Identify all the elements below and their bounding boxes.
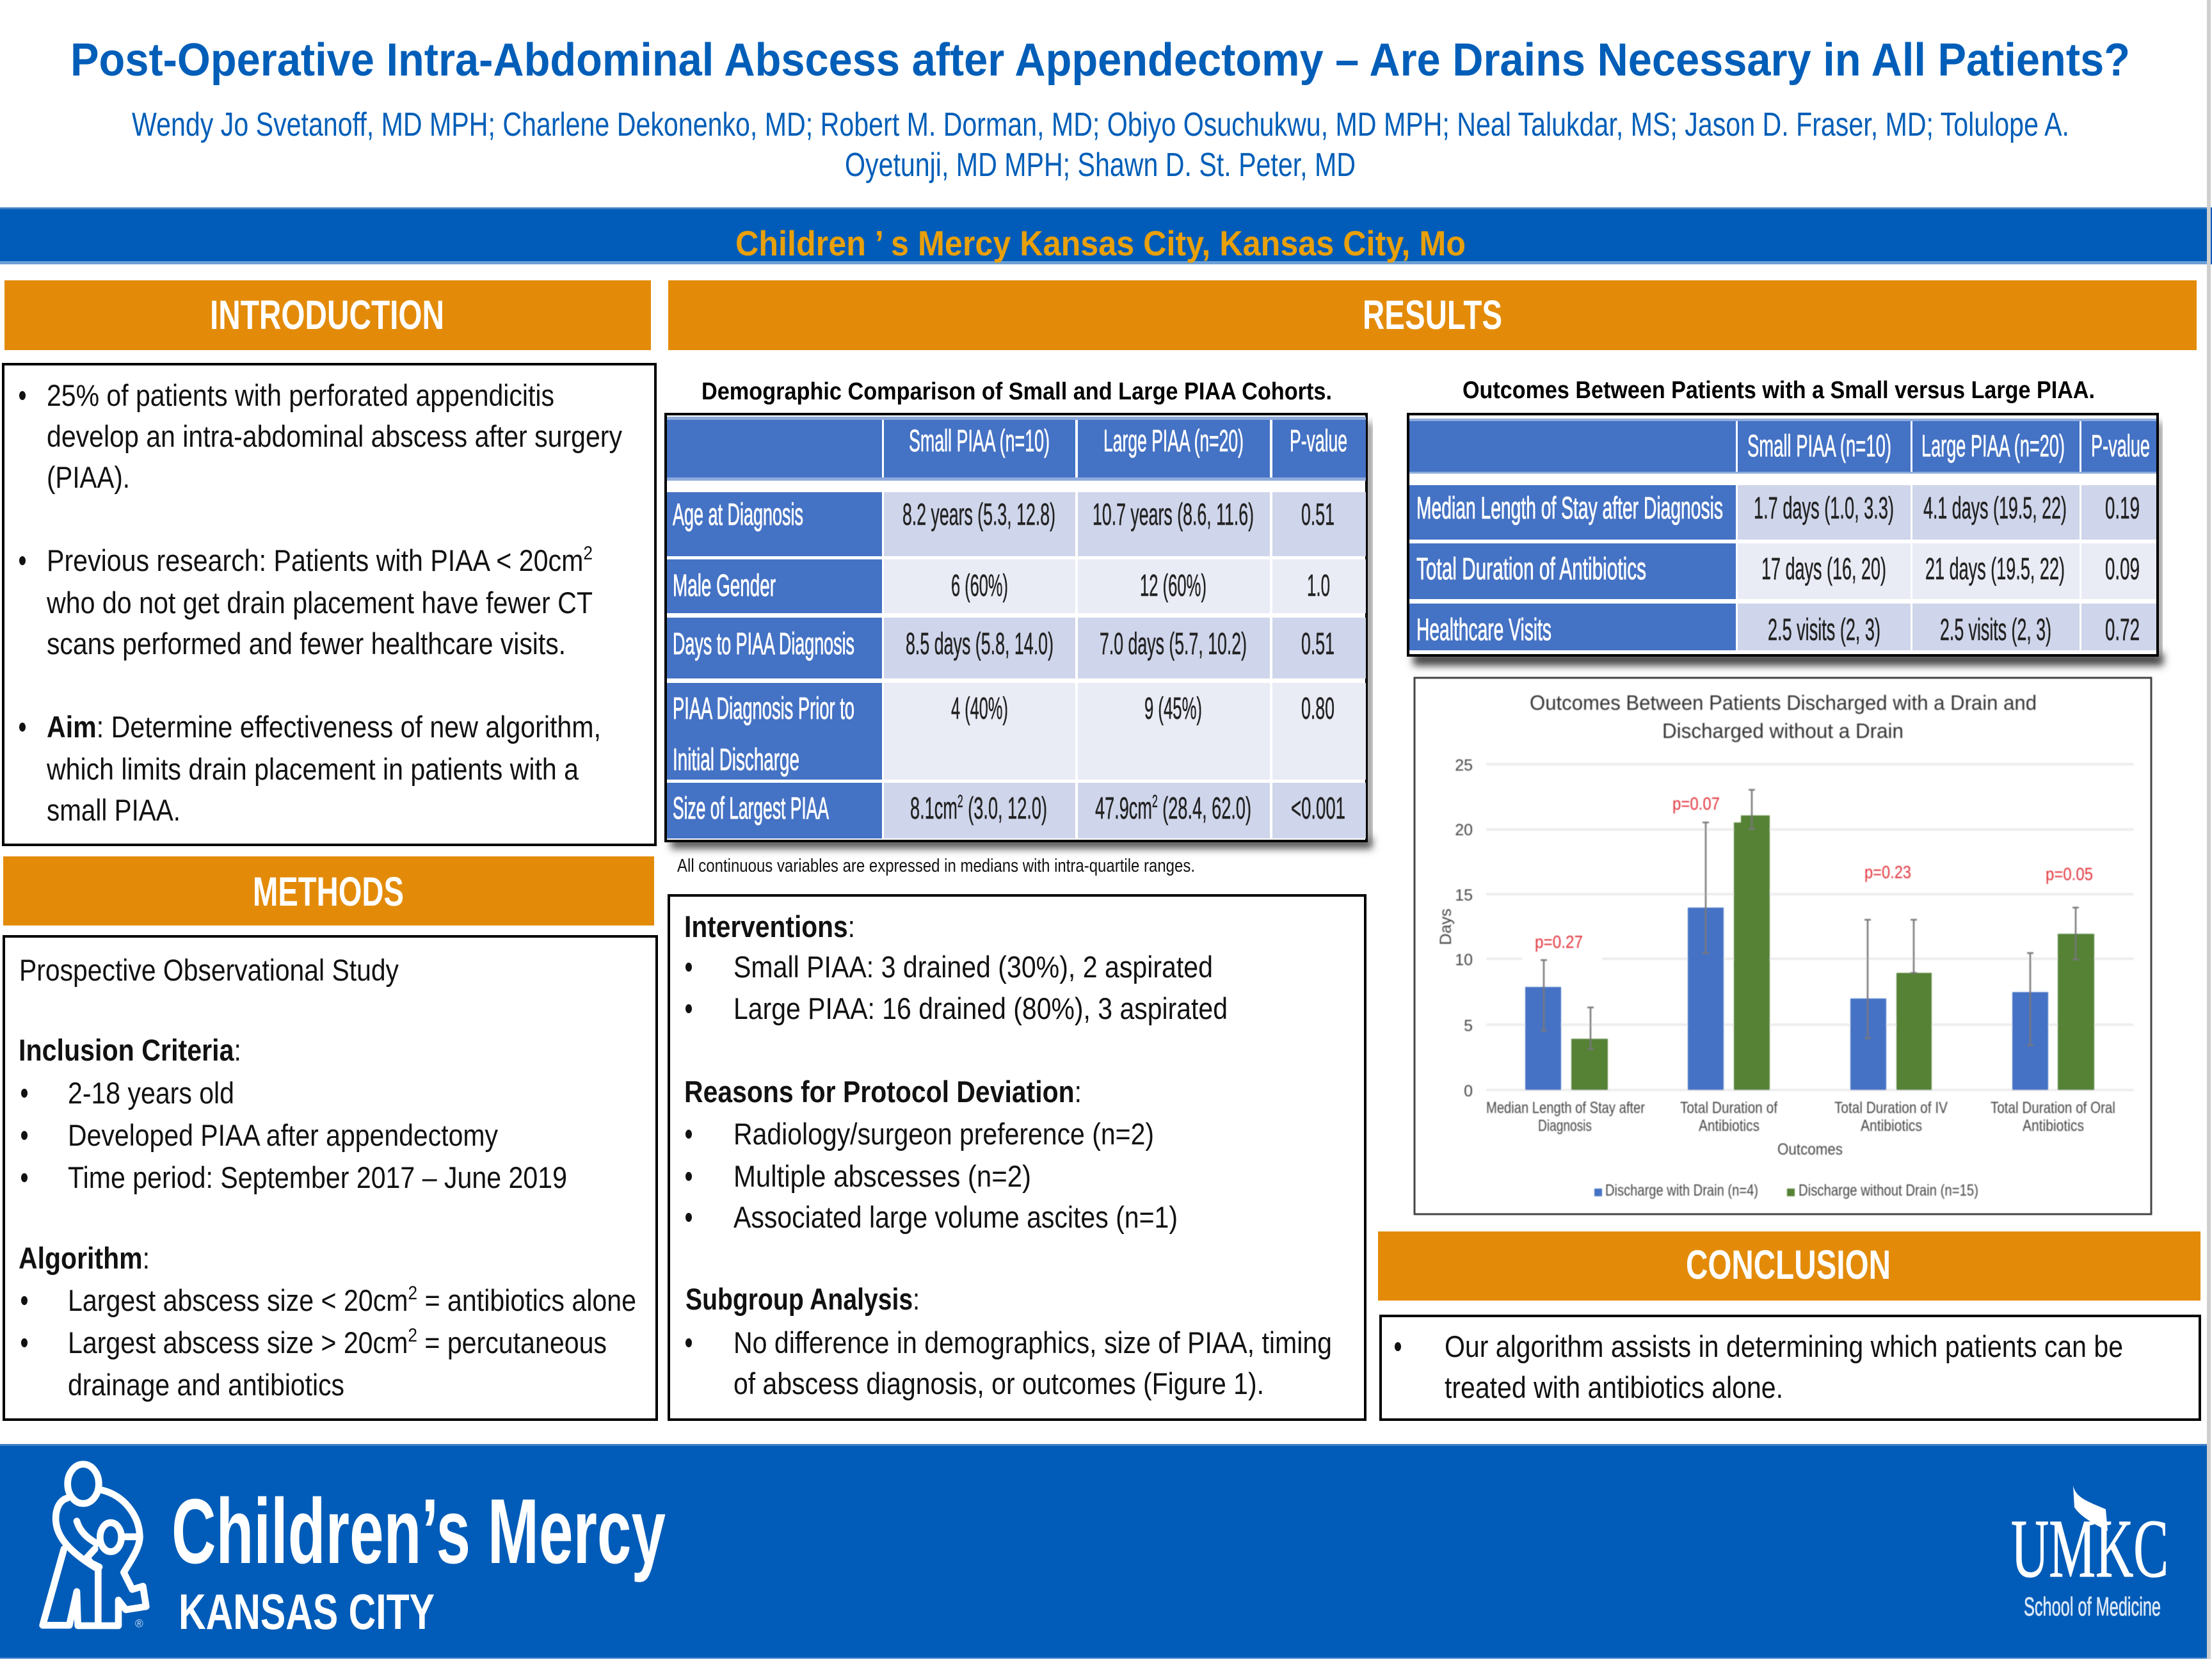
y axis: 0 bbox=[1464, 1082, 1473, 1100]
text block: introduction bbox=[3, 364, 655, 845]
table row: size of largest PIAA: 2 bbox=[1152, 791, 1158, 811]
text block: introduction: (PIAA). bbox=[47, 460, 130, 494]
x axis labels: Total Duration of Oral bbox=[1991, 1099, 2115, 1117]
text block: introduction: which limits drain placement in patients with a bbox=[46, 752, 579, 786]
table row: size of largest PIAA: Size of Largest PIAA bbox=[673, 792, 829, 826]
table row: total duration of antibiotics: 21 days (19.5, 22) bbox=[1925, 552, 2065, 586]
table row: days to PIAA diagnosis: Days to PIAA Diagnosis bbox=[673, 627, 854, 661]
table row: age at diagnosis: 8.2 years (5.3, 12.8) bbox=[902, 498, 1055, 532]
table row: healthcare visits: Healthcare Visits bbox=[1416, 613, 1551, 647]
table row: size of largest PIAA: (28.4, 62.0) bbox=[1158, 792, 1251, 826]
text block: introduction: scans performed and fewer healthcare visits. bbox=[47, 627, 566, 661]
table row: days to PIAA diagnosis: 7.0 days (5.7, 10.2) bbox=[1100, 627, 1247, 661]
table row: median length of stay: 1.7 days (1.0, 3.3) bbox=[1754, 492, 1894, 525]
table header row bbox=[1409, 419, 2156, 474]
text block: methods bbox=[4, 936, 657, 1420]
text block: methods: Largest abscess size < 20cm bbox=[68, 1283, 456, 1317]
text block: methods: Time period: September 2017 – June 2019 bbox=[68, 1160, 567, 1194]
text block: introduction: Previous research: Patients with PIAA < 20cm bbox=[47, 543, 659, 577]
text block: methods: drainage and antibiotics bbox=[68, 1368, 344, 1402]
bars: discharge without drain bbox=[1571, 815, 2094, 1090]
text block: methods: 2-18 years old bbox=[68, 1076, 234, 1110]
table row: diagnosis prior to initial discharge: Initial Discharge bbox=[673, 743, 799, 777]
y axis: 20 bbox=[1455, 821, 1473, 839]
heading: results: RESULTS bbox=[1363, 292, 1502, 338]
text block: conclusion: treated with antibiotics alone. bbox=[1445, 1370, 1783, 1404]
x axis labels: Total Duration of bbox=[1680, 1099, 1777, 1117]
table row: size of largest PIAA: <0.001 bbox=[1291, 792, 1345, 826]
text block: methods: 2 bbox=[408, 1283, 417, 1304]
panel: conclusion bbox=[1378, 1231, 2200, 1420]
affiliation band bbox=[0, 207, 2212, 264]
table row: diagnosis prior to initial discharge bbox=[667, 683, 1366, 780]
x axis labels: Antibiotics bbox=[1699, 1117, 1759, 1135]
text block: conclusion: Our algorithm assists in determining which patients can be bbox=[1445, 1329, 2123, 1363]
legend: Discharge without Drain (n=15) bbox=[1799, 1182, 1978, 1199]
heading: introduction bbox=[4, 280, 651, 350]
table row: age at diagnosis bbox=[667, 492, 1366, 556]
p-value labels: p=0.23 bbox=[1864, 862, 1911, 882]
text block: interventions, protocol deviation, subgroup analysis: Radiology/surgeon preference (n=2) bbox=[733, 1117, 1154, 1151]
table row: size of largest PIAA: (3.0, 12.0) bbox=[963, 792, 1047, 826]
text block: methods: Algorithm: bbox=[19, 1241, 150, 1275]
panel: methods bbox=[3, 856, 657, 1420]
table header row: P-value bbox=[2091, 429, 2150, 463]
table row: total duration of antibiotics bbox=[1409, 543, 2156, 599]
table row: size of largest PIAA: 47.9cm bbox=[1095, 792, 1196, 826]
bar chart: outcomes with and without a drain bbox=[1415, 678, 2151, 1214]
y axis: 15 bbox=[1455, 886, 1473, 904]
text block: methods: = antibiotics alone bbox=[417, 1283, 636, 1317]
table row: age at diagnosis: 0.51 bbox=[1301, 498, 1334, 532]
table row: male gender: Male Gender bbox=[673, 569, 776, 603]
table row: size of largest PIAA: 8.1cm bbox=[910, 792, 994, 826]
p-value labels bbox=[1535, 794, 2093, 952]
y axis: Days bbox=[1437, 909, 1455, 945]
x axis labels: Total Duration of IV bbox=[1834, 1099, 1948, 1117]
x axis labels: Diagnosis bbox=[1538, 1117, 1592, 1135]
heading: results bbox=[668, 280, 2197, 350]
heading: methods bbox=[3, 856, 654, 926]
table row: healthcare visits bbox=[1409, 604, 2156, 650]
table row: days to PIAA diagnosis bbox=[667, 618, 1366, 678]
table caption: outcomes: Outcomes Between Patients with a Small versus Large PIAA. bbox=[1463, 377, 2095, 404]
icon: adult holding child bbox=[43, 1464, 146, 1630]
p-value labels: p=0.27 bbox=[1535, 932, 1583, 952]
table row: diagnosis prior to initial discharge: PIAA Diagnosis Prior to bbox=[673, 692, 854, 726]
table row: median length of stay bbox=[1409, 485, 2156, 540]
table row: male gender: 6 (60%) bbox=[951, 569, 1008, 603]
chart title: Discharged without a Drain bbox=[1662, 719, 1903, 742]
icon: adult holding child: ® bbox=[135, 1617, 143, 1630]
text block: conclusion bbox=[1381, 1316, 2200, 1420]
text block: introduction: develop an intra-abdominal abscess after surgery bbox=[47, 419, 622, 453]
table header row: Large PIAA (n=20) bbox=[1921, 429, 2065, 463]
logo: UMKC School of Medicine bbox=[2011, 1486, 2168, 1621]
logo: Children's Mercy: KANSAS CITY bbox=[179, 1583, 435, 1640]
text block: interventions, protocol deviation, subgroup analysis bbox=[669, 895, 1365, 1420]
chart title: Outcomes Between Patients Discharged with a Drain and bbox=[1530, 691, 2037, 714]
table row: male gender bbox=[667, 559, 1366, 613]
bars: discharge with drain bbox=[1525, 908, 2048, 1090]
logo: Children's Mercy: Children’s Mercy bbox=[172, 1480, 666, 1583]
table row: healthcare visits: 0.72 bbox=[2105, 613, 2140, 647]
table row: male gender: 1.0 bbox=[1307, 569, 1330, 603]
x axis labels: Antibiotics bbox=[2023, 1117, 2084, 1135]
text block: interventions, protocol deviation, subgroup analysis: Interventions: bbox=[684, 910, 855, 943]
legend bbox=[1594, 1182, 1978, 1199]
table header row bbox=[667, 417, 1366, 481]
legend: Discharge with Drain (n=4) bbox=[1605, 1182, 1758, 1199]
text block: interventions, protocol deviation, subgroup analysis: Subgroup Analysis: bbox=[685, 1282, 920, 1316]
table row: healthcare visits: 2.5 visits (2, 3) bbox=[1940, 613, 2051, 647]
x axis labels: Median Length of Stay after bbox=[1486, 1099, 1645, 1117]
heading: introduction: INTRODUCTION bbox=[210, 292, 444, 338]
text block: methods: Developed PIAA after appendectomy bbox=[68, 1118, 498, 1152]
table: demographic comparison bbox=[666, 414, 1372, 849]
p-value labels: p=0.07 bbox=[1672, 794, 1720, 813]
error bars bbox=[1541, 790, 2079, 1049]
table row: days to PIAA diagnosis: 8.5 days (5.8, 14.0) bbox=[906, 627, 1054, 661]
table row: total duration of antibiotics: Total Duration of Antibiotics bbox=[1416, 552, 1646, 586]
heading: conclusion: CONCLUSION bbox=[1686, 1242, 1891, 1288]
authors: Oyetunji, MD MPH; Shawn D. St. Peter, MD bbox=[845, 147, 1356, 184]
text block: interventions, protocol deviation, subgroup analysis: Small PIAA: 3 drained (30%), 2 aspirated bbox=[733, 950, 1213, 984]
text block: interventions, protocol deviation, subgroup analysis: Multiple abscesses (n=2) bbox=[733, 1159, 1031, 1193]
table row: age at diagnosis: 10.7 years (8.6, 11.6) bbox=[1093, 498, 1254, 532]
table row: size of largest PIAA bbox=[667, 783, 1366, 838]
x axis labels bbox=[1486, 1099, 2115, 1158]
y axis: 5 bbox=[1464, 1017, 1473, 1035]
text block: interventions, protocol deviation, subgroup analysis: Reasons for Protocol Deviation: bbox=[684, 1075, 1082, 1109]
text block: interventions, protocol deviation, subgroup analysis: Associated large volume ascites (n=1) bbox=[733, 1200, 1178, 1234]
table row: diagnosis prior to initial discharge: 9 (45%) bbox=[1144, 692, 1202, 726]
table row: median length of stay: Median Length of Stay after Diagnosis bbox=[1416, 492, 1723, 525]
text block: methods: Largest abscess size > 20cm bbox=[68, 1326, 456, 1359]
table row: age at diagnosis: Age at Diagnosis bbox=[673, 498, 803, 532]
table row: median length of stay: 0.19 bbox=[2105, 492, 2140, 525]
table header row: Large PIAA (n=20) bbox=[1103, 424, 1244, 458]
table row: median length of stay: 4.1 days (19.5, 22) bbox=[1923, 492, 2067, 525]
y axis bbox=[1437, 757, 1473, 1100]
x axis labels: Antibiotics bbox=[1861, 1117, 1922, 1135]
table row: male gender: 12 (60%) bbox=[1140, 569, 1206, 603]
logo: Children's Mercy bbox=[43, 1464, 666, 1640]
p-value labels: p=0.05 bbox=[2046, 864, 2093, 884]
text block: interventions, protocol deviation, subgroup analysis: of abscess diagnosis, or outcomes (Figure 1). bbox=[733, 1366, 1264, 1400]
table header row: Small PIAA (n=10) bbox=[1747, 429, 1891, 463]
footer band bbox=[0, 1444, 2208, 1659]
text block: introduction: 2 bbox=[583, 543, 593, 564]
icon: UMKC flame bbox=[2073, 1486, 2108, 1531]
table: outcomes small versus large PIAA bbox=[1408, 414, 2163, 666]
table header row: Small PIAA (n=10) bbox=[909, 424, 1050, 458]
table row: total duration of antibiotics: 17 days (16, 20) bbox=[1761, 552, 1886, 586]
table row: diagnosis prior to initial discharge: 4 (40%) bbox=[951, 692, 1008, 726]
text block: methods: = percutaneous bbox=[417, 1326, 607, 1359]
text block: introduction: Aim: Determine effectiveness of new algorithm, bbox=[47, 710, 601, 744]
right page edge bbox=[2207, 0, 2212, 1659]
text block: methods: Prospective Observational Study bbox=[19, 953, 399, 987]
table row: healthcare visits: 2.5 visits (2, 3) bbox=[1768, 613, 1880, 647]
table row: total duration of antibiotics: 0.09 bbox=[2105, 552, 2140, 586]
panel: introduction bbox=[3, 280, 655, 845]
text block: introduction: 25% of patients with perforated appendicitis bbox=[47, 378, 554, 412]
affiliation band: Children ’ s Mercy Kansas City, Kansas City, Mo bbox=[735, 223, 1466, 263]
authors bbox=[132, 106, 2069, 184]
table row: diagnosis prior to initial discharge: 0.80 bbox=[1301, 692, 1334, 726]
text block: introduction: small PIAA. bbox=[47, 793, 180, 827]
table footnote: All continuous variables are expressed in medians with intra-quartile ranges. bbox=[677, 856, 1195, 876]
table row: size of largest PIAA: 2 bbox=[958, 791, 963, 811]
x axis labels: Outcomes bbox=[1777, 1141, 1843, 1158]
text block: interventions, protocol deviation, subgroup analysis: No difference in demographics, size of PIAA, timing bbox=[733, 1326, 1332, 1359]
chart title bbox=[1530, 691, 2037, 742]
text block: methods: 2 bbox=[408, 1325, 417, 1346]
text block: introduction: who do not get drain placement have fewer CT bbox=[46, 586, 593, 620]
heading: conclusion bbox=[1378, 1231, 2200, 1301]
table caption: demographic comparison: Demographic Comparison of Small and Large PIAA Cohorts. bbox=[701, 378, 1332, 405]
text block: interventions, protocol deviation, subgroup analysis: Large PIAA: 16 drained (80%), 3 aspirated bbox=[733, 991, 1228, 1025]
text block: methods: Inclusion Criteria: bbox=[19, 1033, 241, 1067]
y axis: 25 bbox=[1455, 757, 1473, 774]
y axis: 10 bbox=[1455, 951, 1473, 969]
heading: methods: METHODS bbox=[253, 869, 404, 915]
table header row: P-value bbox=[1290, 424, 1347, 458]
table row: days to PIAA diagnosis: 0.51 bbox=[1301, 627, 1334, 661]
